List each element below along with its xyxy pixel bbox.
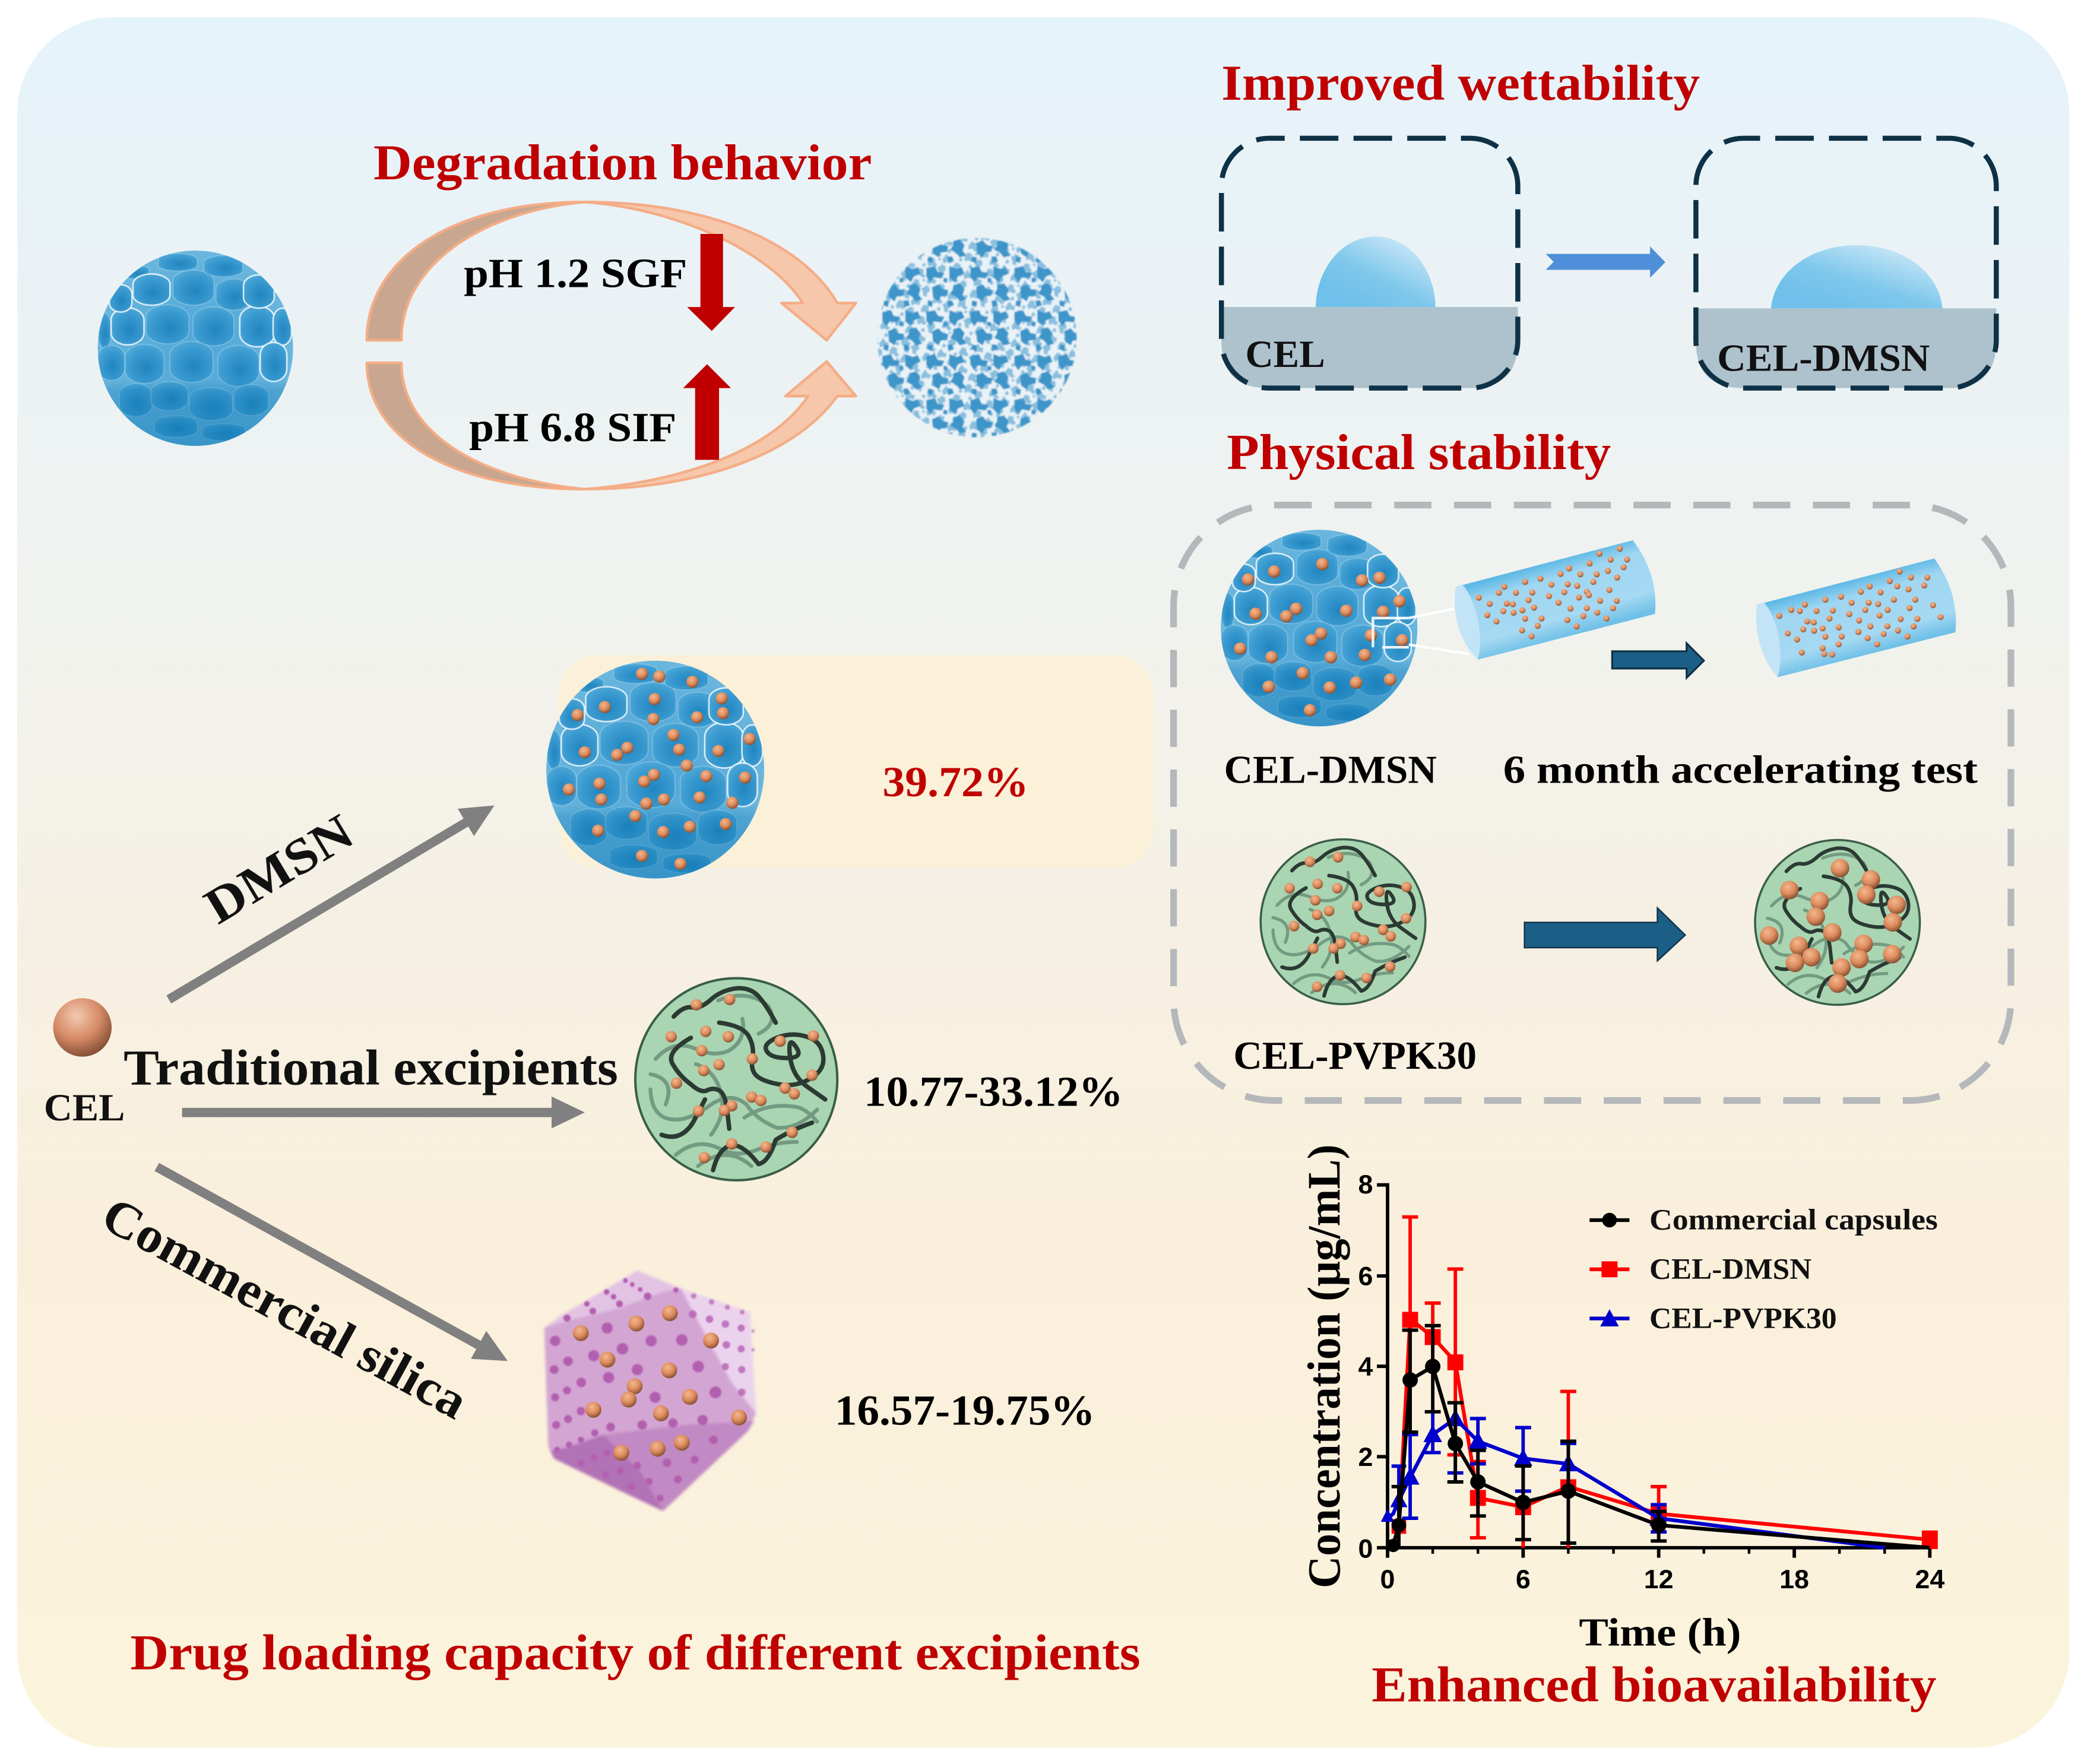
legend: CEL-DMSN [1649,1252,1811,1285]
value: 10.77-33.12%: 10.77-33.12% [864,1068,1123,1115]
arrow: red up [683,364,731,460]
value: 39.72%: 39.72% [882,759,1029,806]
axis title: concentration: Concentration (μg/mL) [1298,1144,1350,1588]
arrow: traditional route [182,1097,585,1129]
series: Commercial capsules [1386,1326,1930,1552]
title: Improved wettability: Improved wettability [1221,55,1700,111]
x tick labels: 0 [1380,1565,1395,1594]
chart: plasma concentration vs time [1298,1144,1944,1654]
label: Traditional excipients: Traditional excipients [123,1040,618,1096]
x tick labels [1380,1565,1944,1594]
icon: CEL-PVPK30 sphere before [1260,840,1426,1004]
icon: traditional excipient sphere [635,978,837,1180]
x tick labels: 12 [1644,1565,1674,1594]
legend: CEL-PVPK30 [1649,1301,1837,1334]
label: 6 month accelerating test: 6 month accelerating test [1503,748,1978,792]
label: CEL-PVPK30: CEL-PVPK30 [1233,1033,1477,1078]
label: pH 1.2 SGF: pH 1.2 SGF [464,251,687,297]
arrow: wettability [1545,246,1665,278]
label: CEL: CEL [1245,333,1325,376]
x tick labels: 24 [1915,1565,1944,1594]
icon: CEL-DMSN loaded sphere [1221,530,1469,726]
label: pH 6.8 SIF: pH 6.8 SIF [469,405,676,451]
y tick labels: 8 [1358,1170,1373,1199]
icon: degraded sphere fragments [877,238,1076,437]
y tick labels: 4 [1358,1352,1373,1382]
panel: drug loading capacity [44,655,1154,1681]
arrow: lower curved arrow [367,362,856,489]
y tick labels: 0 [1358,1534,1373,1564]
x tick labels: 6 [1516,1565,1531,1594]
axis title: time: Time (h) [1579,1610,1741,1654]
y tick labels [1358,1170,1373,1564]
icon: commercial silica polyhedron [544,1271,756,1511]
arrow: small dark arrow [1612,643,1704,678]
y tick labels: 6 [1358,1262,1373,1291]
panel: degradation diagram [98,202,1076,489]
series: CEL-PVPK30 [1381,1402,1885,1548]
arrow: large dark arrow [1525,908,1685,961]
legend [1589,1204,1938,1334]
icon: CEL ball [53,998,112,1057]
arrow: red down [687,234,735,331]
label: Commercial silica: Commercial silica [93,1186,477,1430]
icon: pore cylinder before [1455,540,1655,660]
label: DMSN: DMSN [195,803,363,935]
highlight box: DMSN result [558,655,1154,868]
title: Enhanced bioavailability: Enhanced bioavailability [1372,1657,1937,1712]
arrow: upper curved arrow [367,202,856,340]
icon: pore cylinder after [1756,559,1956,677]
panel: CEL-DMSN wettability box [1696,138,1996,388]
legend: Commercial capsules [1649,1204,1938,1236]
label: CEL-DMSN: CEL-DMSN [1224,748,1437,792]
arrow: DMSN route [169,806,495,999]
title: Degradation behavior: Degradation behavior [373,135,872,191]
label: CEL-DMSN: CEL-DMSN [1717,337,1930,380]
value: 16.57-19.75%: 16.57-19.75% [835,1388,1095,1434]
axes [1377,1185,1930,1558]
title: Physical stability: Physical stability [1227,425,1611,480]
panel: physical stability [1174,505,2011,1101]
icon: intact DMSN sphere [98,251,293,446]
label: CEL: CEL [44,1087,125,1129]
arrow: commercial silica route [157,1167,508,1361]
panel: CEL wettability box [1221,138,1518,388]
icon: DMSN loaded sphere [546,661,764,879]
title: Drug loading capacity: Drug loading capacity of different excipients [130,1625,1141,1681]
x tick labels: 18 [1779,1565,1809,1594]
icon: CEL-PVPK30 sphere after [1755,840,1920,1005]
y tick labels: 2 [1358,1442,1373,1472]
series: CEL-DMSN [1388,1217,1938,1549]
